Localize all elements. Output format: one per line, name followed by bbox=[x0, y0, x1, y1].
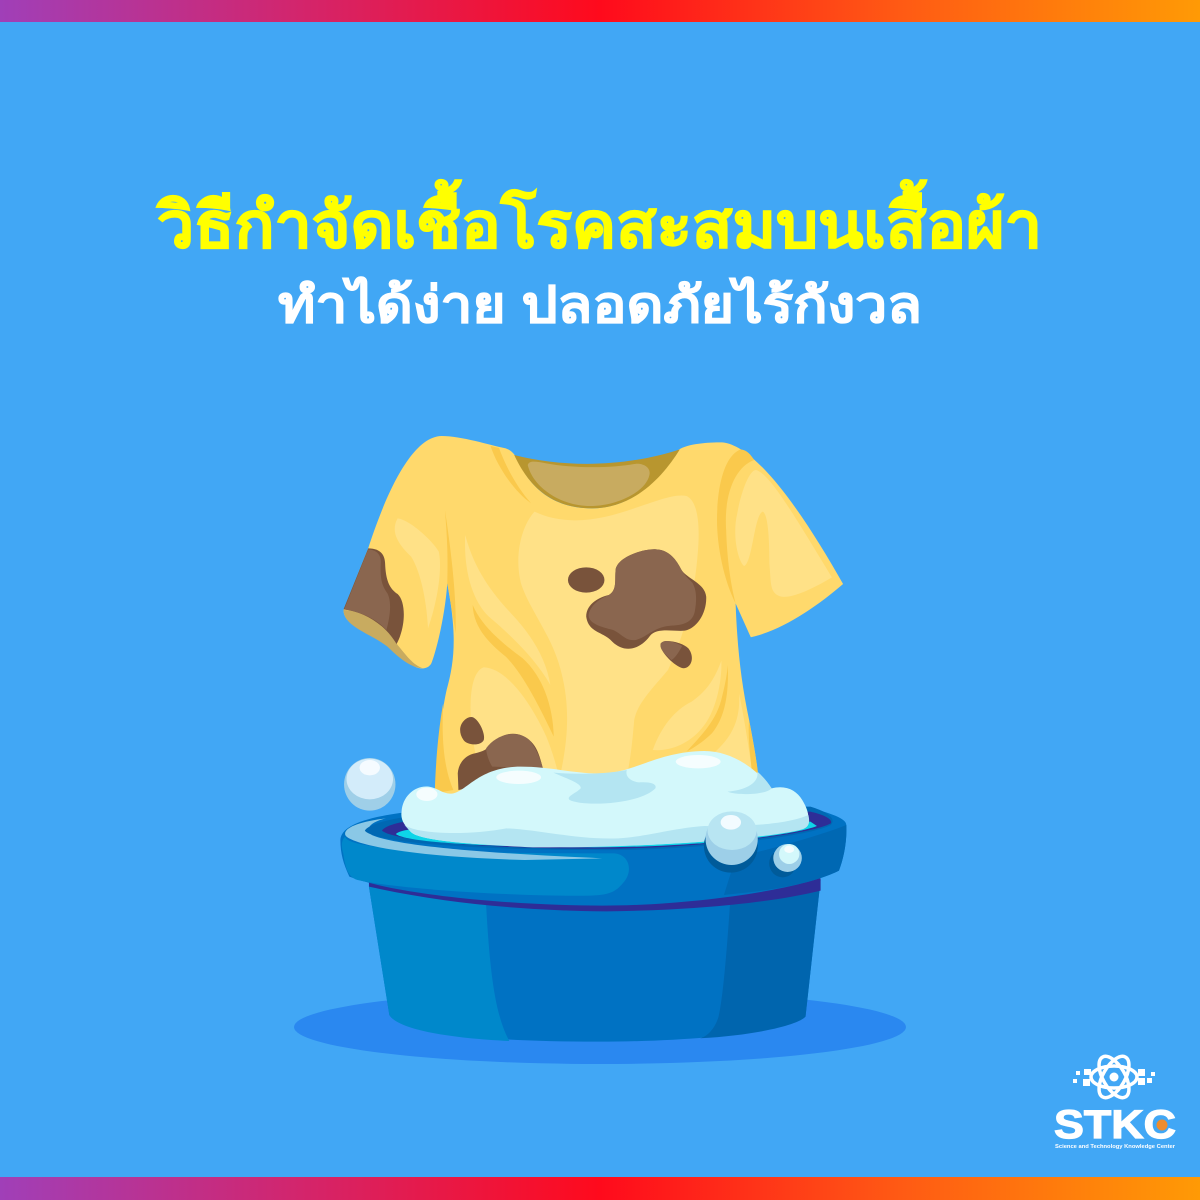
illustration: stained t-shirt bbox=[344, 436, 843, 797]
sleeve stain bbox=[344, 548, 404, 644]
title: วิธีกำจัดเชื้อโรคสะสมบนเสื้อผ้า bbox=[155, 179, 1042, 261]
logo tagline: Science and Technology Knowledge Center bbox=[1055, 1144, 1176, 1150]
chest stain drops bbox=[568, 567, 604, 593]
foam bbox=[401, 751, 808, 847]
floor shadow bbox=[294, 990, 906, 1064]
lower stains bbox=[460, 717, 484, 744]
large chest stain bbox=[586, 549, 706, 649]
basin body bbox=[369, 880, 821, 1042]
basin opening bbox=[365, 807, 833, 850]
bubble left bbox=[344, 758, 395, 811]
basin rim shadow band bbox=[369, 878, 821, 911]
logo pixel squares bbox=[1073, 1069, 1155, 1086]
collar bbox=[514, 449, 680, 508]
shirt light patches bbox=[518, 495, 699, 777]
top gradient bar bbox=[0, 0, 1200, 22]
logo orange dot bbox=[1156, 1120, 1168, 1130]
small bubble on rim bbox=[769, 844, 802, 877]
logo: STKC bbox=[1054, 1052, 1176, 1150]
shirt fold shadows bbox=[445, 510, 456, 633]
shirt body bbox=[344, 436, 843, 797]
subtitle: ทำได้ง่าย ปลอดภัยไร้กังวล bbox=[278, 276, 922, 333]
sleeve hem bbox=[344, 610, 423, 668]
basin rim bbox=[340, 807, 846, 906]
logo atom icon bbox=[1091, 1052, 1137, 1102]
illustration: wash basin with foam bbox=[340, 751, 846, 1042]
logo wordmark: STKC bbox=[1054, 1103, 1176, 1147]
bottom gradient bar bbox=[0, 1177, 1200, 1200]
bubble on rim bbox=[704, 811, 758, 873]
